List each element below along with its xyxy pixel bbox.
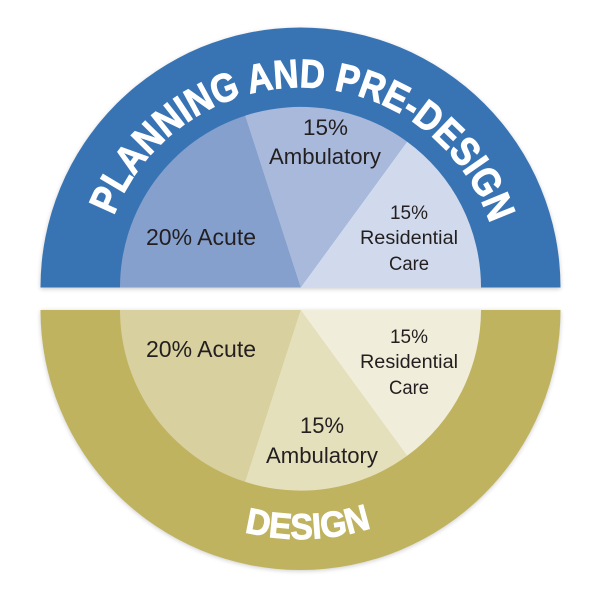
slice: ambulatory (planning) [245, 107, 407, 288]
panel: design semicircle [38, 309, 562, 573]
label: 15% residential care (design): Care [389, 378, 429, 399]
label: 15% ambulatory (planning): 15% [303, 115, 348, 140]
outer band: design [40, 310, 560, 570]
label: 20% acute (design): 20% Acute [146, 336, 256, 362]
slice: residential care (design) [300, 310, 481, 456]
heading: design: DESIGN [246, 504, 370, 540]
label: 15% residential care (design): 15% [390, 327, 428, 348]
label: 15% ambulatory (planning): Ambulatory [269, 144, 381, 169]
label: 15% residential care (planning): 15% [390, 203, 428, 224]
label: 15% residential care (planning): Residential [360, 228, 458, 249]
slice: acute (planning) [120, 116, 300, 288]
label: 15% residential care (planning) [360, 203, 458, 275]
panel: planning and pre-design semicircle [38, 27, 562, 291]
slice: residential care (planning) [300, 142, 481, 288]
label: 15% ambulatory (planning) [269, 115, 381, 169]
label: 15% residential care (design): Residential [360, 352, 458, 373]
slice: acute (design) [120, 310, 300, 482]
label: 20% acute (planning): 20% Acute [146, 224, 256, 250]
label: 15% residential care (design) [360, 327, 458, 399]
label: 15% ambulatory (design): 15% [300, 413, 344, 438]
label: 15% residential care (planning): Care [389, 254, 429, 275]
label: 15% ambulatory (design) [266, 413, 378, 468]
heading: planning and pre-design: PLANNING AND PRE-DESIGN [88, 59, 516, 222]
outer band: planning [40, 28, 560, 288]
label: 15% ambulatory (design): Ambulatory [266, 443, 378, 468]
slice: ambulatory (design) [245, 310, 407, 491]
